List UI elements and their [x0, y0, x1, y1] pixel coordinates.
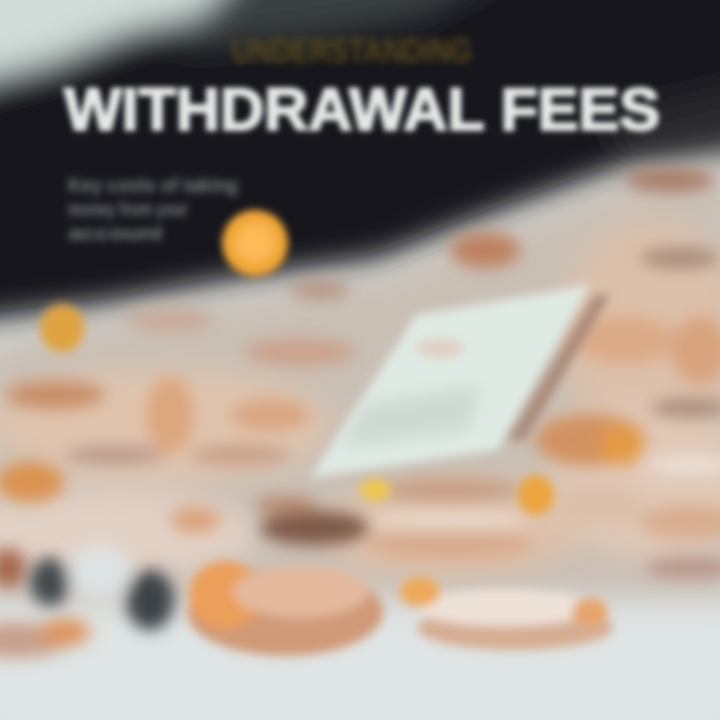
body text	[68, 175, 238, 245]
receipt / paper sheet	[310, 285, 610, 478]
gold coin accents	[40, 210, 554, 515]
overline heading: UNDERSTANDING	[232, 32, 472, 70]
body text: Key costs of taking	[68, 175, 238, 197]
warm grey mid-ground haze	[0, 170, 720, 720]
large front coins	[187, 561, 613, 656]
coin stack details	[0, 168, 720, 658]
body text: money from your	[68, 199, 188, 221]
dark upper backdrop	[0, 0, 720, 325]
dark coins lower left	[30, 546, 174, 630]
title: WITHDRAWAL FEES	[64, 76, 660, 143]
body text: account	[68, 223, 163, 245]
coin stacks: warm mid-ground field	[0, 220, 720, 580]
